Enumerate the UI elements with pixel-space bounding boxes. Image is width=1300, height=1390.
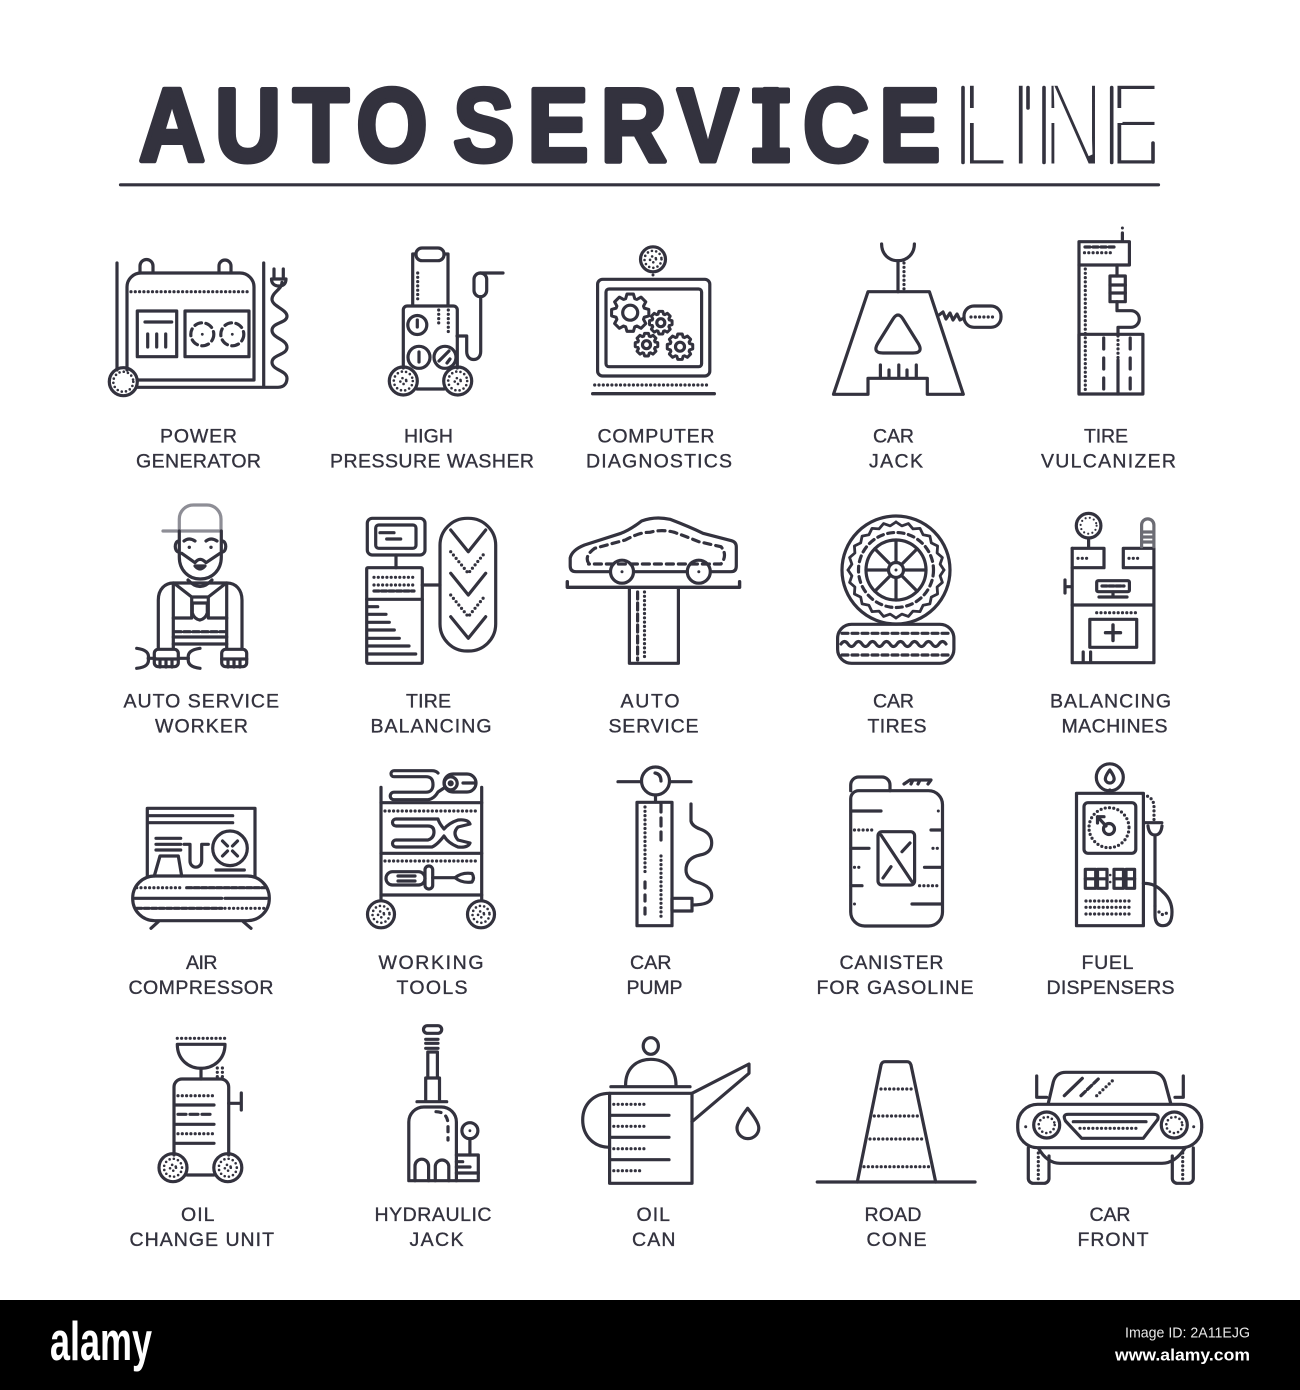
label: oil can <box>632 1204 676 1251</box>
icon: oil change unit <box>159 1038 242 1182</box>
label: canister for gasoline <box>816 952 974 999</box>
icon: hydraulic jack <box>409 1026 478 1181</box>
icon: canister for gasoline <box>851 777 943 926</box>
icon: car pump <box>618 767 712 926</box>
label: auto service worker: AUTO SERVICE <box>124 690 279 712</box>
label: hydraulic jack: JACK <box>410 1229 464 1251</box>
label: oil change unit <box>130 1204 274 1251</box>
item: car jack <box>834 244 1001 472</box>
label: fuel dispensers: FUEL <box>1082 952 1134 974</box>
label: balancing machines: BALANCING <box>1050 690 1171 712</box>
footer bar <box>0 1300 1300 1390</box>
item: fuel dispensers <box>1046 764 1174 999</box>
label: auto service: SERVICE <box>608 715 698 737</box>
label: car pump: PUMP <box>626 977 682 999</box>
title rule <box>120 183 1158 186</box>
label: oil change unit: OIL <box>181 1204 215 1226</box>
item: balancing machines <box>1050 513 1171 737</box>
item: hydraulic jack <box>374 1026 492 1251</box>
label: auto service worker: WORKER <box>155 715 248 737</box>
label: fuel dispensers <box>1046 952 1174 999</box>
icon: road cone <box>817 1062 975 1182</box>
label: car pump: CAR <box>630 952 672 974</box>
label: road cone: CONE <box>866 1229 926 1251</box>
item: tire vulcanizer <box>1041 226 1176 472</box>
label: tire vulcanizer <box>1041 426 1176 472</box>
icon: car tires <box>838 516 954 663</box>
label: high pressure washer <box>330 426 534 472</box>
item: car pump <box>618 767 712 999</box>
label: canister for gasoline: CANISTER <box>840 952 944 974</box>
label: oil can: CAN <box>632 1229 676 1251</box>
label: computer diagnostics: COMPUTER <box>598 426 714 448</box>
label: car front: FRONT <box>1078 1229 1149 1251</box>
icon: working tools <box>368 771 494 928</box>
title: AUTO SERVICE <box>139 67 940 183</box>
label: car jack <box>869 426 923 472</box>
item: high pressure washer <box>330 248 534 472</box>
label: air compressor <box>128 952 274 999</box>
label: oil change unit: CHANGE UNIT <box>130 1229 274 1251</box>
label: fuel dispensers: DISPENSERS <box>1046 977 1174 999</box>
icon: computer diagnostics <box>593 247 714 394</box>
label: oil can: OIL <box>636 1204 670 1226</box>
label: high pressure washer: PRESSURE WASHER <box>330 450 534 472</box>
item: car front <box>1018 1072 1202 1251</box>
label: canister for gasoline: FOR GASOLINE <box>816 977 974 999</box>
label: working tools <box>378 952 484 999</box>
label: tire vulcanizer: TIRE <box>1084 426 1128 448</box>
icon: car jack <box>834 244 1001 394</box>
label: power generator: POWER <box>160 426 237 448</box>
icon: tire vulcanizer <box>1079 226 1143 394</box>
label: car jack: CAR <box>873 426 914 448</box>
label: hydraulic jack: HYDRAULIC <box>374 1204 492 1226</box>
label: auto service <box>608 690 698 737</box>
item: car tires <box>838 516 954 737</box>
label: car jack: JACK <box>869 450 923 472</box>
footer: logo: alamy <box>50 1310 152 1372</box>
item: auto service lift <box>567 518 740 737</box>
icon: auto service worker <box>137 505 247 668</box>
label: car front: CAR <box>1090 1204 1130 1226</box>
label: auto service worker <box>124 690 279 737</box>
item: power generator <box>109 260 287 472</box>
label: auto service: AUTO <box>620 690 680 712</box>
label: car tires: CAR <box>873 690 914 712</box>
icon: auto service lift <box>567 518 740 663</box>
icon: power generator <box>109 260 287 396</box>
footer: website: www.alamy.com <box>1114 1346 1250 1364</box>
item: air compressor <box>128 808 274 999</box>
icon: fuel dispensers <box>1076 764 1172 926</box>
icon: balancing machines <box>1065 513 1154 663</box>
icon: air compressor <box>133 808 269 928</box>
item: oil can <box>583 1038 759 1251</box>
label: air compressor: AIR <box>186 952 218 974</box>
label: air compressor: COMPRESSOR <box>128 977 274 999</box>
label: road cone <box>864 1204 926 1251</box>
label: tire vulcanizer: VULCANIZER <box>1041 450 1176 472</box>
label: power generator <box>136 426 261 472</box>
item: tire balancing <box>367 518 496 737</box>
label: car front <box>1078 1204 1149 1251</box>
icon: car front <box>1018 1072 1202 1183</box>
label: car pump <box>626 952 682 999</box>
label: balancing machines <box>1050 690 1171 737</box>
item: road cone <box>817 1062 975 1251</box>
label: tire balancing <box>370 690 492 737</box>
label: car tires: TIRES <box>868 715 926 737</box>
label: power generator: GENERATOR <box>136 450 261 472</box>
label: road cone: ROAD <box>864 1204 922 1226</box>
item: computer diagnostics <box>586 247 732 472</box>
label: tire balancing: TIRE <box>406 690 451 712</box>
title: inline word LINE: LINE <box>961 58 1165 193</box>
label: working tools: TOOLS <box>396 977 468 999</box>
label: computer diagnostics: DIAGNOSTICS <box>586 450 732 472</box>
item: auto service worker <box>124 505 279 737</box>
label: computer diagnostics <box>586 426 732 472</box>
item: working tools <box>368 771 494 999</box>
icon: tire balancing <box>367 518 496 663</box>
icon: high pressure washer <box>389 248 503 395</box>
label: car tires <box>868 690 926 737</box>
label: tire balancing: BALANCING <box>370 715 492 737</box>
label: hydraulic jack <box>374 1204 492 1251</box>
item: oil change unit <box>130 1038 274 1251</box>
label: working tools: WORKING <box>378 952 484 974</box>
label: balancing machines: MACHINES <box>1062 715 1168 737</box>
item: canister for gasoline <box>816 777 974 999</box>
label: high pressure washer: HIGH <box>404 426 453 448</box>
footer: image id: Image ID: 2A11EJG <box>1125 1324 1250 1342</box>
icon: oil can <box>583 1038 759 1183</box>
